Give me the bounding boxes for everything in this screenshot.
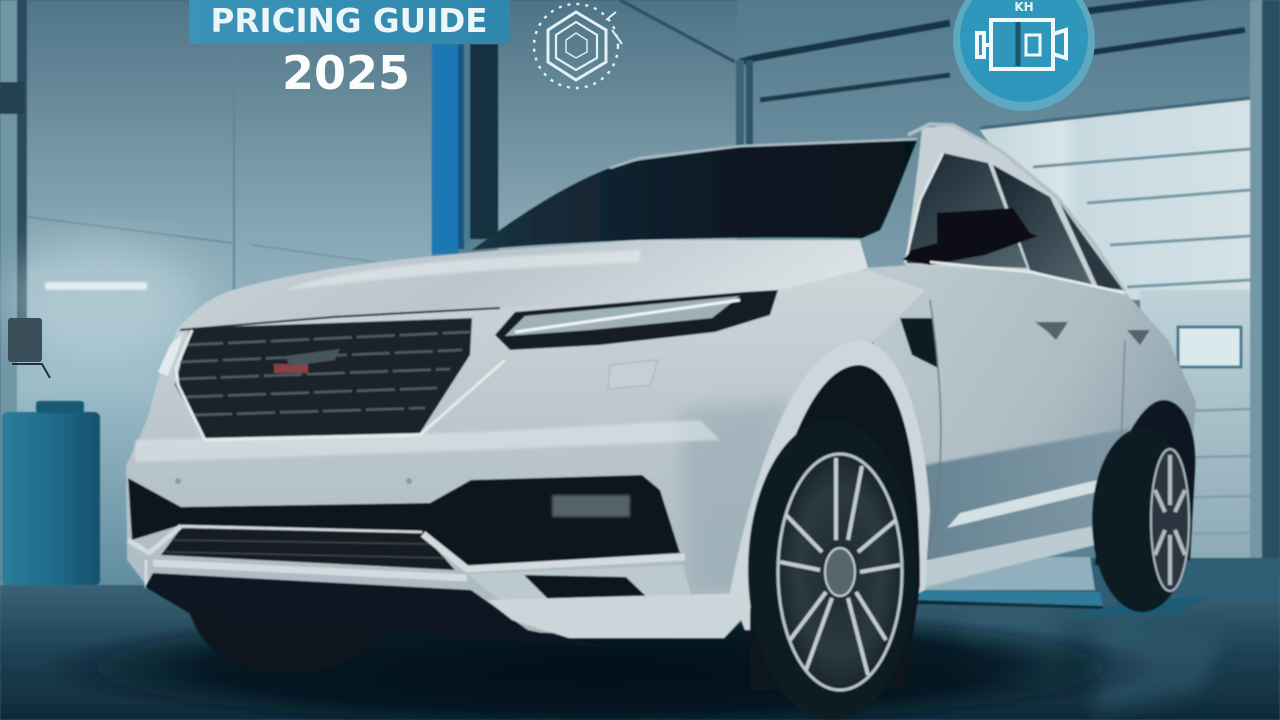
shadow (40, 606, 1160, 720)
sill (917, 520, 1123, 588)
hood edge line (180, 308, 500, 330)
side mirror (903, 208, 1038, 265)
bottom lip (487, 593, 748, 638)
hood (178, 240, 868, 330)
roof rail (908, 124, 1125, 292)
icon: hexagon emblem (534, 4, 622, 88)
windshield (472, 140, 917, 250)
fog lamp (552, 495, 630, 517)
side body (865, 264, 1196, 590)
side crease highlight (947, 480, 1117, 528)
door handles (1035, 322, 1068, 340)
SUV (40, 124, 1196, 720)
side vent (900, 318, 938, 368)
floor (0, 557, 1280, 720)
badge (274, 364, 308, 373)
icon text: KH (1014, 0, 1034, 14)
parking sensors (175, 478, 412, 484)
front-left wheel (189, 610, 386, 673)
grille frame (176, 330, 505, 440)
belt line (930, 262, 1125, 293)
banner text: PRICING GUIDE (210, 1, 488, 40)
banner: pricing guide (189, 0, 510, 44)
icon: engine badge (953, 0, 1095, 111)
front wheel arch (730, 340, 930, 630)
left headlight (158, 333, 183, 376)
lower white panel (467, 565, 691, 600)
lower door shade (925, 428, 1130, 578)
lower intake right (524, 575, 652, 603)
grille (175, 318, 472, 438)
chrome bumper trim (128, 526, 685, 588)
fender shade (680, 400, 790, 590)
underside (145, 573, 610, 647)
side windows (905, 153, 1123, 290)
main body front (126, 268, 925, 638)
front wheel (748, 420, 916, 720)
hood panel reflector (608, 360, 658, 389)
door seams (927, 300, 941, 560)
blue barrel (2, 401, 100, 586)
year: 2025 (282, 46, 410, 100)
rear wheel (1092, 400, 1195, 612)
bumper highlight (135, 420, 720, 462)
wall light and equipment (0, 240, 200, 378)
roof and window frame (905, 125, 1125, 292)
windshield upper trim (610, 139, 917, 168)
lower grille (161, 528, 455, 570)
blue lift column (432, 44, 498, 254)
headlight (495, 290, 778, 350)
garage door (620, 0, 1280, 570)
hood crease (285, 250, 640, 290)
lower bumper dark band (128, 475, 680, 566)
